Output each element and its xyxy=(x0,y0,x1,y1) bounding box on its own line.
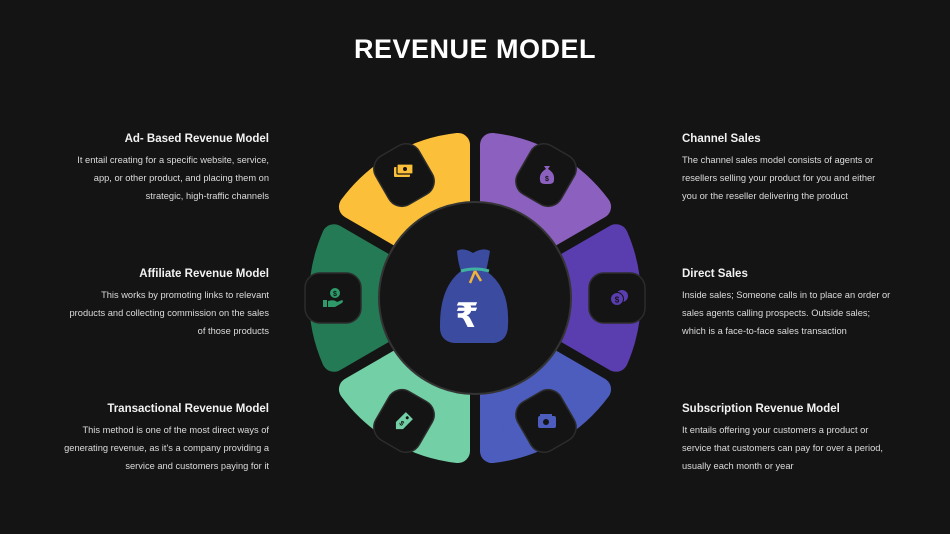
text: channel sales: you or the reseller delivering the product xyxy=(682,191,848,201)
icon: hand with coin (green): $ xyxy=(333,291,337,298)
text: subscription: usually each month or year xyxy=(682,461,794,471)
text: channel sales: resellers selling your product for you and either xyxy=(682,173,875,183)
icon: rupee money bag: ₹ xyxy=(455,296,479,336)
text: transactional: service and customers paying for it xyxy=(125,461,269,471)
text: transactional: This method is one of the most direct ways of xyxy=(82,425,269,435)
text: affiliate: Affiliate Revenue Model xyxy=(139,268,269,280)
segment: lavender xyxy=(464,120,614,255)
center circle xyxy=(379,202,571,394)
icon: money bag (lavender) xyxy=(540,166,554,184)
text: channel sales xyxy=(682,133,876,201)
text: ad-based: app, or other product, and placing them on xyxy=(94,173,269,183)
text: subscription xyxy=(682,403,883,471)
segment: green xyxy=(305,236,390,360)
text: subscription: Subscription Revenue Model xyxy=(682,403,840,415)
text: transactional: generating revenue, as it's a company providing a xyxy=(64,443,269,453)
text: transactional xyxy=(64,403,270,471)
text: ad-based: strategic, high-traffic channels xyxy=(146,191,269,201)
text: subscription: It entails offering your customers a product or xyxy=(682,425,868,435)
text: channel sales: Channel Sales xyxy=(682,133,761,145)
segment: yellow xyxy=(336,120,486,255)
text: direct sales: which is a face-to-face sales transaction xyxy=(682,326,847,336)
text: affiliate xyxy=(70,268,269,336)
segment: light green xyxy=(336,341,486,476)
icon: rupee money bag xyxy=(440,249,508,343)
text: direct sales: Inside sales; Someone calls in to place an order or xyxy=(682,290,890,300)
text: ad-based xyxy=(77,133,269,201)
icon: price tag (light green): $ xyxy=(397,420,405,428)
text: affiliate: products and collecting commission on the sales xyxy=(70,308,269,318)
icon: coins (violet): $ xyxy=(615,296,620,304)
segment: violet xyxy=(560,236,645,360)
text: affiliate: This works by promoting links to relevant xyxy=(101,290,269,300)
text: affiliate: of those products xyxy=(198,326,269,336)
icon: coins (violet) xyxy=(610,290,628,306)
icon: cash (yellow) xyxy=(394,164,413,177)
text: ad-based: Ad- Based Revenue Model xyxy=(125,133,269,145)
icon: hand with coin (green) xyxy=(323,288,343,307)
icon: price tag (light green) xyxy=(392,412,413,433)
text: transactional: Transactional Revenue Model xyxy=(107,403,269,415)
segment: blue xyxy=(464,341,614,476)
icon: money bag (lavender): $ xyxy=(545,176,549,183)
text: subscription: service that customers can pay for over a period, xyxy=(682,443,883,453)
text: direct sales: sales agents calling prospects. Outside sales; xyxy=(682,308,870,318)
text: channel sales: The channel sales model consists of agents or xyxy=(682,155,873,165)
text: direct sales: Direct Sales xyxy=(682,268,748,280)
text: direct sales xyxy=(682,268,890,336)
icon: wallet cash (blue) xyxy=(538,414,556,428)
text: ad-based: It entail creating for a specific website, service, xyxy=(77,155,269,165)
title: REVENUE MODEL xyxy=(354,34,596,64)
